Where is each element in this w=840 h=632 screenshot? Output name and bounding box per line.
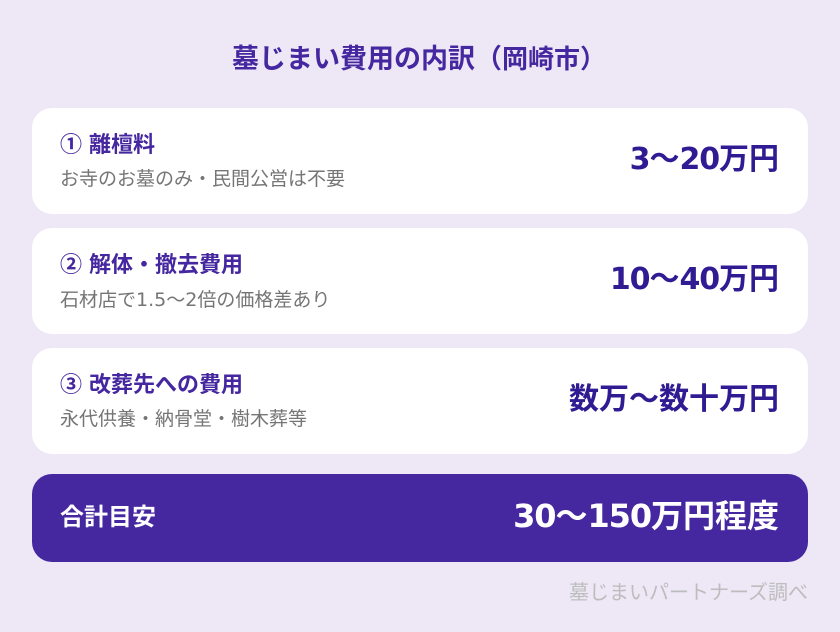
item description: お寺のお墓のみ・民間公営は不要 [60,169,345,190]
item heading: 解体・撤去費用 [89,252,243,277]
item description: 永代供養・納骨堂・樹木葬等 [60,409,307,430]
item amount: 数万〜数十万円 [569,383,779,416]
panel: 改葬先への費用 [32,348,808,454]
item heading: ③ [60,372,82,397]
total amount: 30〜150万円程度 [513,497,779,535]
item heading [60,132,155,157]
item heading: ② [60,252,82,277]
item heading: ① [60,132,82,157]
item amount: 3〜20万円 [630,142,779,177]
title: 墓じまい費用の内訳（岡崎市） [232,44,606,74]
item description: 石材店で1.5〜2倍の価格差あり [60,289,330,311]
item heading: 改葬先への費用 [89,372,243,397]
item heading: 離檀料 [89,132,155,157]
total label: 合計目安 [60,504,156,531]
panel: total [32,474,808,562]
source note: 墓じまいパートナーズ調べ [569,582,808,604]
panel: 離檀料 [32,108,808,214]
item amount: 10〜40万円 [610,262,779,297]
panel: 解体・撤去費用 [32,228,808,334]
